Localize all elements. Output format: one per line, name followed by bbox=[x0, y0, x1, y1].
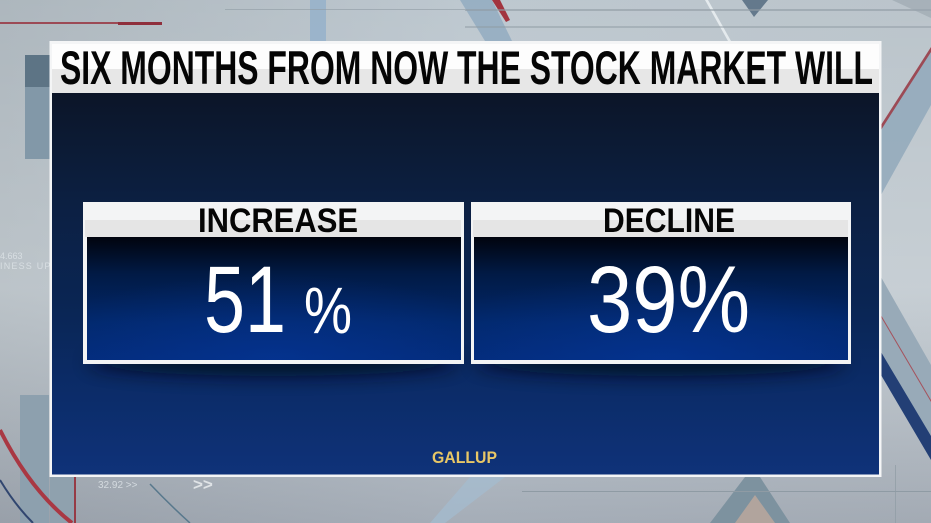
ticker text decoration: 32.92 >> bbox=[98, 480, 138, 491]
ticker text decoration: INESS UP bbox=[0, 261, 52, 271]
value: 39%: 39% bbox=[587, 247, 750, 353]
ticker text decoration: >> bbox=[193, 475, 213, 494]
card: increase bbox=[83, 202, 464, 376]
ticker text decoration bbox=[0, 251, 213, 494]
label: increase: INCREASE bbox=[198, 202, 358, 240]
value: 51%: % bbox=[304, 273, 352, 347]
source: gallup: GALLUP bbox=[432, 448, 497, 467]
card: decline bbox=[471, 202, 851, 376]
main panel bbox=[50, 41, 882, 477]
ticker text decoration: 4.663 bbox=[0, 251, 23, 261]
value: 51%: 51 bbox=[204, 247, 286, 353]
label: decline: DECLINE bbox=[603, 202, 735, 240]
